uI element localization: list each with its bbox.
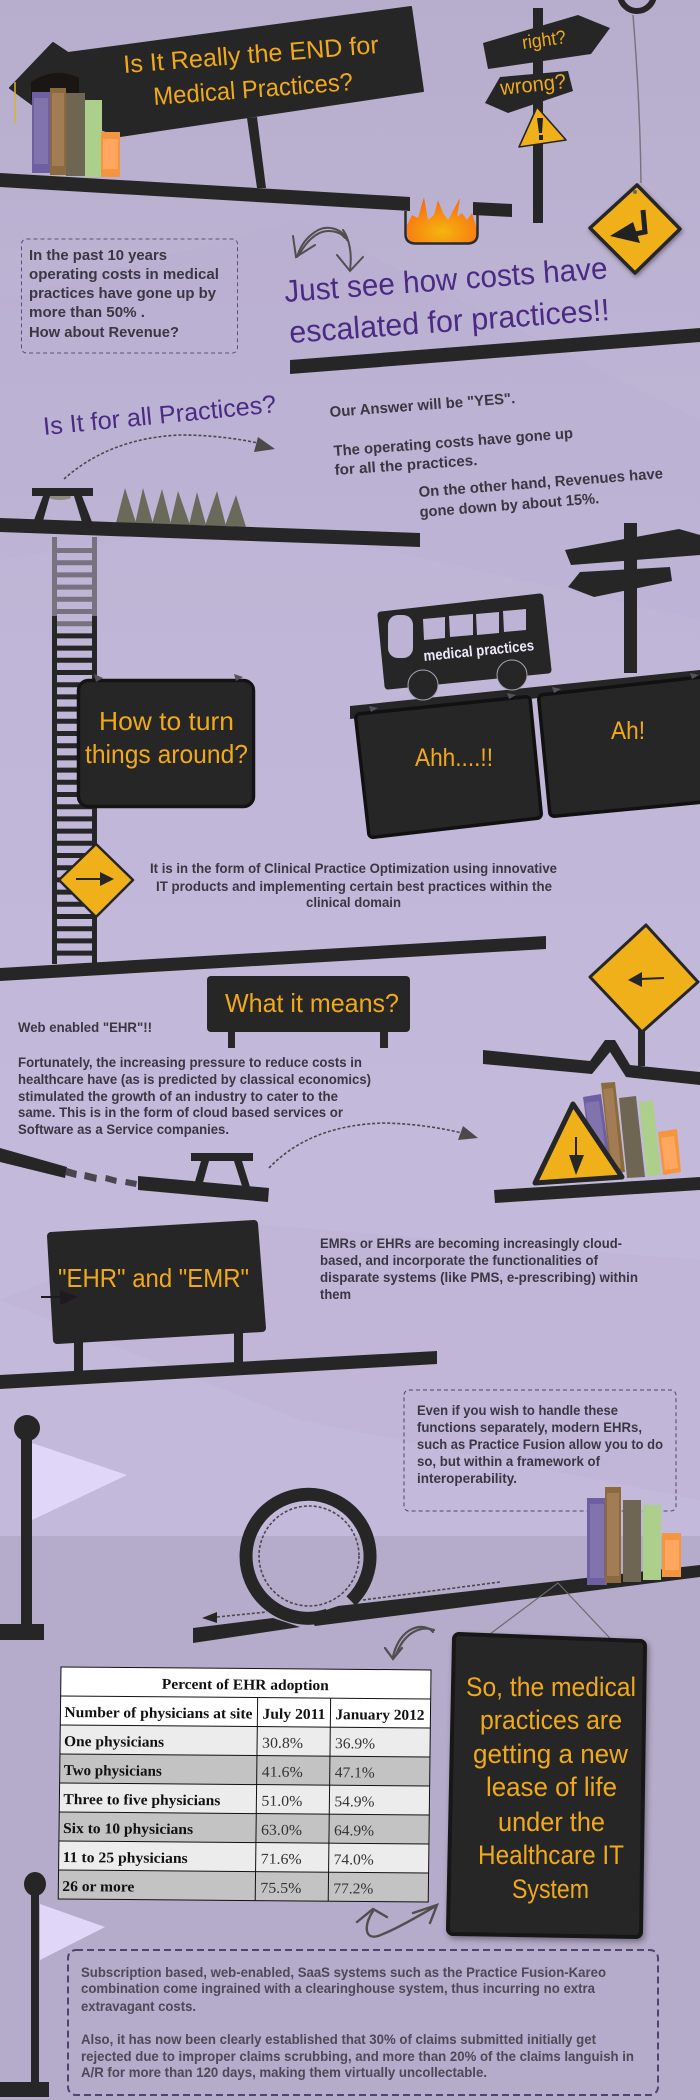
answer text: The operating costs have gone up: [333, 425, 574, 460]
sign: how to turn things around: [78, 674, 254, 806]
icon: flag 2: [0, 1872, 105, 2097]
heading: just see how costs: escalated for practices!!: [288, 292, 611, 350]
heading: is it for all practices: Is It for all Practices?: [42, 390, 277, 441]
answer text: Our Answer will be "YES".: [329, 390, 516, 421]
text box: past 10 years: operating costs in medical: [29, 266, 219, 283]
table rows: Three to five physicians: [63, 1792, 221, 1809]
zigzag shelf: [483, 1040, 700, 1085]
icon: curly arrows bottom: [357, 1905, 437, 1937]
text: web enabled EHR: [18, 1019, 371, 1137]
shelf 4: [0, 936, 546, 981]
text: web enabled EHR: Software as a Service companies.: [18, 1121, 229, 1137]
table rows: 30.8%: [262, 1736, 303, 1752]
icon: diamond right arrow: [59, 844, 133, 917]
text: web enabled EHR: Web enabled "EHR"!!: [18, 1019, 152, 1035]
icon: fire pot: [406, 197, 478, 244]
shelf 3: [0, 518, 420, 547]
hanging board: new lease of life: [453, 1583, 640, 1932]
icon: bus: [350, 597, 700, 719]
table title: Percent of EHR adoption: [162, 1677, 330, 1694]
text: clinical practice optimization: IT products and implementing certain best practices within the: [156, 879, 552, 894]
text box: subscription based: [68, 1950, 658, 2095]
text box: past 10 years: [22, 239, 238, 353]
sign: how to turn things around: How to turn: [99, 706, 234, 736]
spikes: [116, 488, 246, 527]
text box: subscription based: rejected due to improper claims scrubbing, and more than 20% of the claims languish in: [81, 2048, 634, 2064]
broken shelf with bench: [0, 1148, 269, 1202]
title text: [122, 31, 380, 111]
icon: curly arrow down: [385, 1627, 434, 1659]
table rows: 71.6%: [261, 1852, 302, 1868]
text box: subscription based: A/R for more than 120 days, making them virtually uncollectable.: [81, 2064, 487, 2080]
icon: loop ramp: [193, 1494, 700, 1643]
table rows: 77.2%: [333, 1881, 373, 1898]
table rows: 11 to 25 physicians: [63, 1850, 188, 1867]
icon: books on ramp: [587, 1487, 681, 1585]
table rows: Six to 10 physicians: [63, 1821, 193, 1838]
text box: interoperability: [404, 1390, 676, 1511]
sign: Ah: [543, 673, 700, 812]
answer text: gone down by about 15%.: [419, 490, 600, 521]
icon: hanging diamond sign: [590, 0, 680, 273]
table header: January 2012: [335, 1707, 425, 1724]
table rows: 75.5%: [260, 1881, 301, 1897]
board text: [466, 1672, 636, 1904]
title text: Is It Really the END for: [122, 31, 380, 79]
sign: how to turn things around: things around?: [85, 739, 248, 769]
table rows: 54.9%: [334, 1794, 374, 1811]
board text: getting a new: [473, 1739, 628, 1769]
sign: Ahh: [360, 693, 537, 833]
text box: subscription based: Subscription based, web-enabled, SaaS systems such as the Practice Fusion-Kareo: [81, 1964, 606, 1980]
shelf 5: [494, 1177, 700, 1203]
text box: interoperability: interoperability.: [417, 1470, 517, 1486]
icon: curly arrows: [293, 228, 363, 271]
sign: what it means: [207, 976, 410, 1048]
sign: EHR and EMR: "EHR" and "EMR": [58, 1263, 249, 1293]
icon: books with graduation cap: [15, 73, 120, 177]
signpost right / wrong: wrong?: [498, 70, 567, 100]
text box: interoperability: Even if you wish to handle these: [417, 1402, 618, 1418]
shelf 6: [0, 1351, 437, 1389]
text box: subscription based: combination come ingrained with a clearinghouse system, thus incurring no extra: [81, 1980, 595, 1996]
dashed arrow: [64, 435, 275, 479]
heading: just see how costs: [283, 250, 611, 350]
text box: past 10 years: more than 50% .: [29, 304, 145, 321]
text: EMRs or EHRs: based, and incorporate the functionalities of: [320, 1252, 598, 1268]
table: percent of EHR adoption: [58, 1667, 431, 1902]
shelf 2: [290, 328, 700, 374]
heading: just see how costs: Just see how costs have: [283, 250, 609, 309]
text: web enabled EHR: healthcare have (as is predicted by classical economics): [18, 1071, 371, 1087]
text: EMRs or EHRs: disparate systems (like PMS, e-prescribing) within: [320, 1269, 638, 1285]
signpost right / wrong: [483, 8, 610, 223]
sign: what it means: What it means?: [225, 988, 399, 1018]
text: EMRs or EHRs: them: [320, 1286, 351, 1302]
table header: July 2011: [262, 1707, 326, 1723]
icon: diamond left arrow: [590, 925, 698, 1066]
board text: System: [512, 1874, 589, 1904]
bus label: medical practices: [423, 637, 535, 665]
title sign: [10, 7, 423, 188]
text: clinical practice optimization: clinical domain: [306, 895, 401, 910]
text box: past 10 years: How about Revenue?: [29, 324, 179, 341]
table rows: 26 or more: [62, 1879, 135, 1896]
table rows: 63.0%: [261, 1823, 302, 1839]
table rows: 36.9%: [335, 1736, 375, 1753]
text: clinical practice optimization: [150, 861, 557, 910]
sign: Ahh: Ahh....!!: [415, 744, 493, 772]
text: web enabled EHR: same. This is in the form of cloud based services or: [18, 1104, 344, 1120]
table rows: One physicians: [64, 1734, 164, 1751]
table rows: 47.1%: [335, 1765, 375, 1782]
table header: [64, 1705, 425, 1724]
ladder: [52, 537, 97, 964]
board text: practices are: [480, 1705, 622, 1735]
crossroad signpost: [565, 523, 700, 673]
answer text: [329, 390, 664, 521]
text: EMRs or EHRs: [320, 1235, 638, 1302]
board text: Healthcare IT: [478, 1840, 624, 1870]
icon: books behind triangle: [583, 1082, 681, 1178]
text box: past 10 years: practices have gone up by: [29, 285, 217, 302]
shelf 1: [0, 173, 512, 217]
sign: EHR and EMR: [41, 1224, 262, 1372]
table rows: 51.0%: [261, 1794, 302, 1810]
board text: So, the medical: [466, 1672, 636, 1702]
table rows: Two physicians: [64, 1763, 162, 1780]
text: clinical practice optimization: It is in the form of Clinical Practice Optimization using innovative: [150, 861, 557, 876]
text box: subscription based: extravagant costs.: [81, 1998, 196, 2014]
board text: lease of life: [486, 1772, 617, 1802]
answer text: for all the practices.: [334, 452, 478, 479]
dashed arrow 2: [269, 1123, 478, 1168]
table rows: 41.6%: [262, 1765, 303, 1781]
text: EMRs or EHRs: EMRs or EHRs are becoming increasingly cloud-: [320, 1235, 622, 1251]
table rows: 74.0%: [334, 1852, 374, 1869]
text box: interoperability: such as Practice Fusion allow you to do: [417, 1436, 663, 1452]
table header: Number of physicians at site: [64, 1705, 253, 1723]
bench: [32, 488, 93, 522]
board text: under the: [498, 1807, 605, 1837]
icon: triangle down arrow: [535, 1104, 622, 1183]
icon: warning triangle: [519, 107, 566, 147]
sign: Ah: Ah!: [611, 717, 645, 745]
answer text: On the other hand, Revenues have: [418, 465, 664, 501]
icon: flag 1: [0, 1415, 127, 1640]
table rows: [62, 1734, 375, 1898]
text box: subscription based: Also, it has now been clearly established that 30% of claims submitted initially get: [81, 2031, 596, 2047]
text box: interoperability: functions separately, modern EHRs,: [417, 1419, 642, 1435]
text box: interoperability: so, but within a framework of: [417, 1453, 600, 1469]
text: web enabled EHR: stimulated the growth of an industry to cater to the: [18, 1088, 338, 1104]
signpost right / wrong: right?: [521, 27, 567, 54]
text: web enabled EHR: Fortunately, the increasing pressure to reduce costs in: [18, 1054, 362, 1070]
text box: past 10 years: In the past 10 years: [29, 247, 167, 264]
title text: Medical Practices?: [152, 68, 354, 111]
table rows: 64.9%: [334, 1823, 374, 1840]
